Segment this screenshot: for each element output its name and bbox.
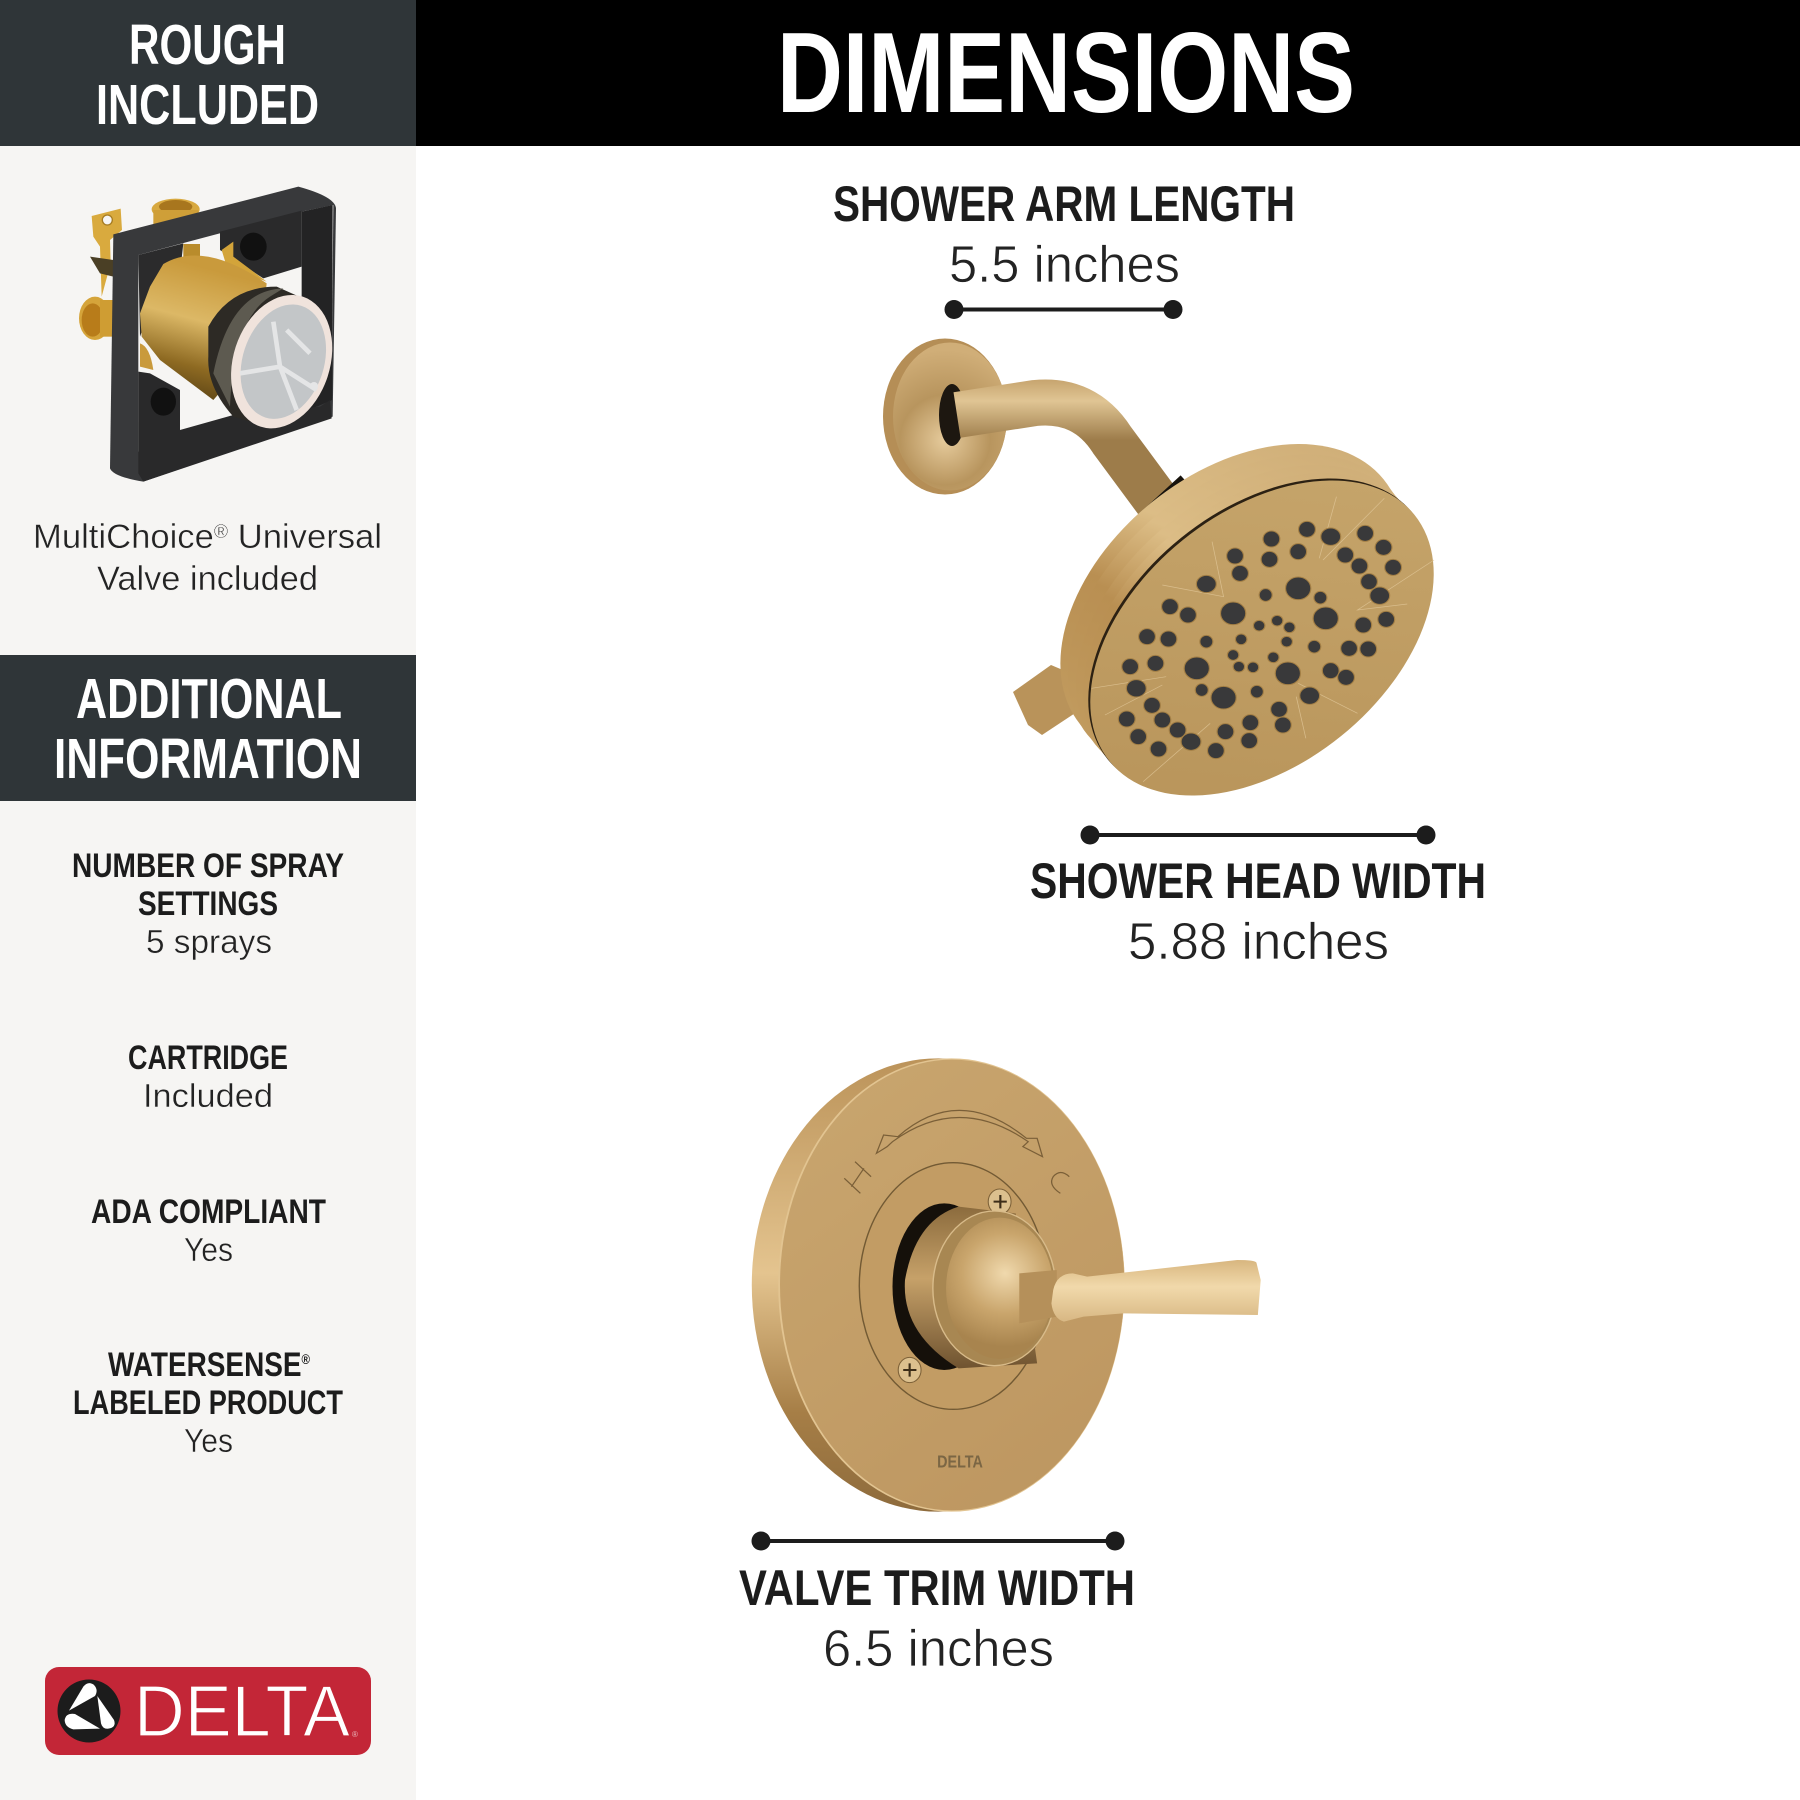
heading: additional information: ADDITIONAL [76,667,342,731]
spec: WaterSense labeled product: ® [302,1351,311,1367]
trim plate [752,1058,1125,1512]
spec: WaterSense labeled product [73,1346,343,1459]
label: shower arm length: 5.5 inches [949,236,1180,294]
label: valve trim width: VALVE TRIM WIDTH [739,1560,1135,1616]
flange [883,338,1007,494]
spec: ADA compliant [91,1193,326,1268]
spec: number of spray settings: 5 sprays [146,923,272,960]
shower arm [939,384,1183,522]
label: shower arm length [833,176,1295,294]
text: valve caption [33,518,382,598]
spec: WaterSense labeled product: LABELED PRODUCT [73,1384,343,1422]
shower head body [1000,380,1492,857]
spec: number of spray settings: NUMBER OF SPRAY [72,847,344,885]
heading: additional information: INFORMATION [54,727,362,791]
logo: Delta: DELTA [134,1672,350,1752]
spec: WaterSense labeled product: Yes [184,1422,233,1459]
spec: number of spray settings [72,847,344,960]
heading: rough included: ROUGH [129,13,286,77]
spec: cartridge: Included [143,1077,273,1114]
heading: additional information [0,655,416,801]
heading: rough included: INCLUDED [96,73,319,137]
heading: rough included [0,0,416,146]
logo: Delta [45,1667,371,1755]
title bar: dimensions: DIMENSIONS [777,10,1355,137]
illustration: shower head and arm [883,338,1494,859]
mounting screws [898,1189,1011,1383]
temperature markings [844,1110,1069,1193]
spec: WaterSense labeled product: WATERSENSE [108,1346,344,1384]
title bar: dimensions [416,0,1800,146]
spec: ADA compliant: ADA COMPLIANT [91,1193,326,1231]
text: valve caption: MultiChoice [33,518,211,556]
spec: number of spray settings: SETTINGS [138,885,278,923]
handle lever [1051,1260,1261,1322]
shower head face [1030,417,1494,859]
handle base [892,1203,1057,1370]
inner ring [859,1163,1047,1409]
illustration: valve trim and handle [752,1058,1261,1512]
spec: cartridge: CARTRIDGE [128,1039,288,1077]
panel: left sidebar [0,0,416,1800]
brand mark: DELTA [937,1451,983,1471]
label: valve trim width: 6.5 inches [823,1620,1054,1678]
icon: rough-in valve [79,187,349,482]
label: shower head width: 5.88 inches [1128,913,1389,971]
spec: ADA compliant: Yes [184,1231,233,1268]
text: valve caption: ® [214,522,228,543]
dimension line: shower arm [944,300,1182,319]
label: valve trim width [739,1560,1135,1678]
label: shower head width [1030,853,1486,971]
spec: cartridge [128,1039,288,1114]
text: valve caption: Universal [228,518,382,556]
logo: Delta: ® [352,1730,358,1739]
text: valve caption: Valve included [97,560,318,598]
dimension line: shower head [1080,826,1436,844]
label: shower head width: SHOWER HEAD WIDTH [1030,853,1486,909]
label: shower arm length: SHOWER ARM LENGTH [833,176,1295,232]
spray nozzles [1092,497,1434,782]
dimension line: valve trim [752,1532,1124,1550]
